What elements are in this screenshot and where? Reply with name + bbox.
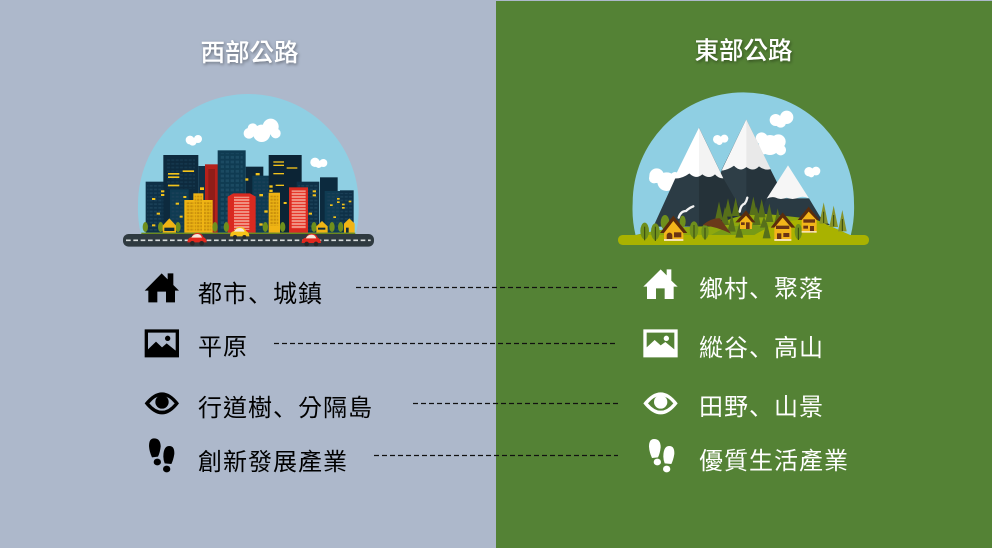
text: east row 4: 優質生活產業 [699, 448, 849, 475]
farm field [703, 218, 731, 234]
panel: east highway background [496, 1, 992, 548]
text: east row 3: 田野、山景 [699, 387, 824, 422]
near peak [653, 128, 747, 227]
connector: row 4 dashed line [374, 454, 618, 456]
icon: house, east [643, 269, 678, 299]
connector: row 3 dashed line [413, 402, 618, 404]
tree line [715, 197, 782, 238]
icon: footprints, east [649, 439, 674, 472]
illustration: mountain village [618, 92, 869, 245]
hills and ground [636, 213, 850, 245]
middle peak [710, 119, 790, 225]
text: west row 2: 平原 [198, 334, 248, 361]
icon: eye, east [643, 392, 678, 414]
text: west row 3: 行道樹、分隔島 [198, 388, 373, 423]
houses [660, 207, 819, 241]
text: west row 4: 創新發展產業 [198, 449, 348, 476]
illustration: city skyline [123, 94, 374, 247]
heading: east highway: 東部公路 [694, 37, 792, 65]
connector: row 2 dashed line [274, 342, 618, 344]
icon: picture, east [643, 329, 678, 357]
smoke [679, 198, 747, 218]
icon: house, west [145, 273, 179, 302]
text: west row 1: 都市、城鎮 [198, 274, 323, 309]
icon: footprints, west [149, 438, 174, 472]
far peak [757, 198, 830, 225]
text: east row 1: 鄉村、聚落 [699, 269, 824, 304]
heading: west highway: 西部公路 [200, 39, 298, 67]
icon: picture, west [145, 329, 179, 357]
icon: eye, west [145, 392, 179, 414]
connector: row 1 dashed line [356, 286, 618, 288]
panel: west highway background [0, 0, 496, 548]
text: east row 2: 縱谷、高山 [699, 328, 824, 363]
